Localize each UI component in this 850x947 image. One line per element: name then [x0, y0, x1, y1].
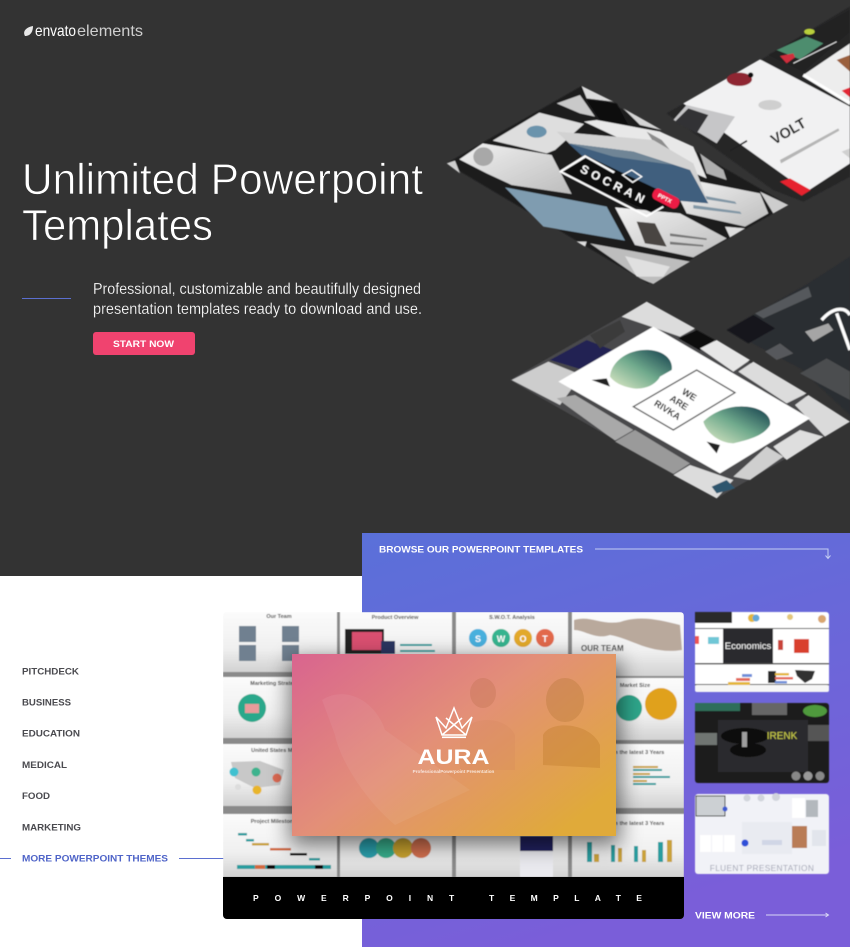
- logo: [24, 23, 143, 40]
- blue panel: [362, 533, 850, 947]
- template: aura deck: O: [519, 634, 527, 644]
- hero dark background: [0, 0, 850, 576]
- template: aura deck: OUR TEAM: [581, 644, 624, 653]
- slide titles: [250, 614, 664, 827]
- black banner: [558, 155, 680, 213]
- logo: envato: [35, 23, 76, 40]
- shiny mouse: [758, 100, 782, 110]
- swot hexagons: [469, 629, 487, 647]
- arrow: [595, 549, 830, 558]
- slide titles: Our Team: [266, 614, 292, 620]
- logo: elements: [77, 23, 143, 40]
- title: Templates: [22, 201, 213, 250]
- link: view more: VIEW MORE: [695, 910, 755, 920]
- heading: browse templates: [379, 544, 830, 558]
- horizontal bars: [633, 769, 670, 785]
- circles row: [359, 838, 379, 858]
- white lower-left section: [0, 576, 362, 947]
- we are rivka box: [633, 370, 735, 430]
- hero slide shadow: [290, 660, 620, 845]
- subtitle: [93, 281, 422, 318]
- slide titles: from the latest 3 Years: [606, 750, 664, 756]
- map: [231, 761, 284, 788]
- teal heads: [610, 350, 672, 389]
- link: view more: [695, 910, 828, 920]
- our team banner: [574, 619, 682, 651]
- market circles: [616, 695, 642, 721]
- list slide: [680, 182, 768, 227]
- marketing icon: [238, 694, 266, 722]
- title: Unlimited Powerpoint: [22, 155, 423, 204]
- category list: BUSINESS: [22, 696, 71, 708]
- thumbnail: irenk: [695, 703, 829, 783]
- mockup: rivka template: RIVKA: [652, 398, 682, 422]
- mockup: socran template: SOCRAN: [578, 162, 650, 208]
- phone mockup: [520, 860, 554, 877]
- heading: browse templates: BROWSE OUR POWERPOINT TEMPLATES: [379, 544, 584, 556]
- slide titles: Market Size: [620, 683, 650, 689]
- slide titles: S.W.O.T. Analysis: [489, 615, 535, 621]
- template: aura deck: S: [475, 634, 481, 644]
- title: [22, 155, 423, 250]
- template: aura deck: [223, 612, 684, 919]
- volt text: VOLT: [768, 116, 809, 148]
- white slide: [558, 327, 810, 473]
- red object: [727, 73, 752, 86]
- mockup: rivka template: ARE: [668, 393, 690, 412]
- thumbnail: economics: [695, 612, 829, 692]
- hero slide: aura: ProfessionalPowerpoint Presentation: [413, 769, 495, 774]
- thumbnail: fluent presentation: [695, 793, 829, 874]
- divider line: [22, 298, 71, 299]
- slides: [459, 143, 572, 194]
- white slide: [683, 59, 850, 192]
- category list: EDUCATION: [22, 728, 80, 738]
- mockup: socran template: PPTX: [656, 193, 673, 205]
- gantt bars: [237, 833, 331, 869]
- subtitle: Professional, customizable and beautifully designed: [93, 281, 421, 298]
- slide grid: [223, 612, 684, 877]
- template: aura deck: T: [542, 634, 548, 644]
- icon: envato leaf: [24, 26, 33, 36]
- slide titles: United States Map: [251, 748, 299, 754]
- slide titles: Product Overview: [372, 615, 419, 621]
- person slide: [615, 207, 727, 257]
- category list: [22, 666, 81, 832]
- mockup: rivka template: WE: [680, 387, 698, 403]
- thumbnail: fluent presentation: FLUENT PRESENTATION: [710, 863, 814, 873]
- center slide: [557, 132, 708, 203]
- blue grey slide: [505, 187, 625, 241]
- dark thumbnail: [768, 10, 850, 72]
- category list: MARKETING: [22, 822, 81, 832]
- subtitle: presentation templates ready to download and use.: [93, 301, 422, 318]
- link: more powerpoint themes: MORE POWERPOINT THEMES: [22, 852, 168, 864]
- hero slide: aura: [292, 654, 616, 836]
- slide titles: Marketing Strategy: [250, 681, 301, 687]
- mockup: dark deck: [727, 257, 850, 415]
- red tab: [780, 178, 811, 196]
- lower slides: [590, 243, 690, 284]
- photo hints: [322, 694, 470, 825]
- arrow: [766, 913, 828, 917]
- black band: [223, 877, 684, 919]
- slide titles: from the latest 3 Years: [606, 821, 664, 827]
- category list: PITCHDECK: [22, 666, 79, 676]
- slide titles: Project Milestones: [251, 819, 299, 825]
- product overview: [345, 629, 384, 654]
- upper right slide: [803, 43, 850, 105]
- template: aura deck: TEMPLATE: [489, 893, 657, 903]
- mockup: volt template: [667, 7, 850, 202]
- template: aura deck: POWERPOINT: [253, 893, 470, 903]
- crown logo: [436, 708, 472, 735]
- laptop: [673, 105, 735, 143]
- category list: MEDICAL: [22, 759, 67, 770]
- button: start now: [93, 332, 195, 355]
- mockup: socran template: [447, 86, 788, 284]
- mockup: rivka template: [510, 302, 850, 498]
- thumbnail: irenk: IRENK: [767, 731, 798, 742]
- our team photos: [239, 626, 299, 661]
- column chart: [587, 842, 663, 862]
- button: start now: START NOW: [113, 339, 174, 350]
- category list: FOOD: [22, 790, 50, 801]
- hero slide: aura: AURA: [418, 745, 490, 769]
- template: aura deck: W: [497, 634, 506, 644]
- thumbnail: economics: Economics: [725, 641, 771, 652]
